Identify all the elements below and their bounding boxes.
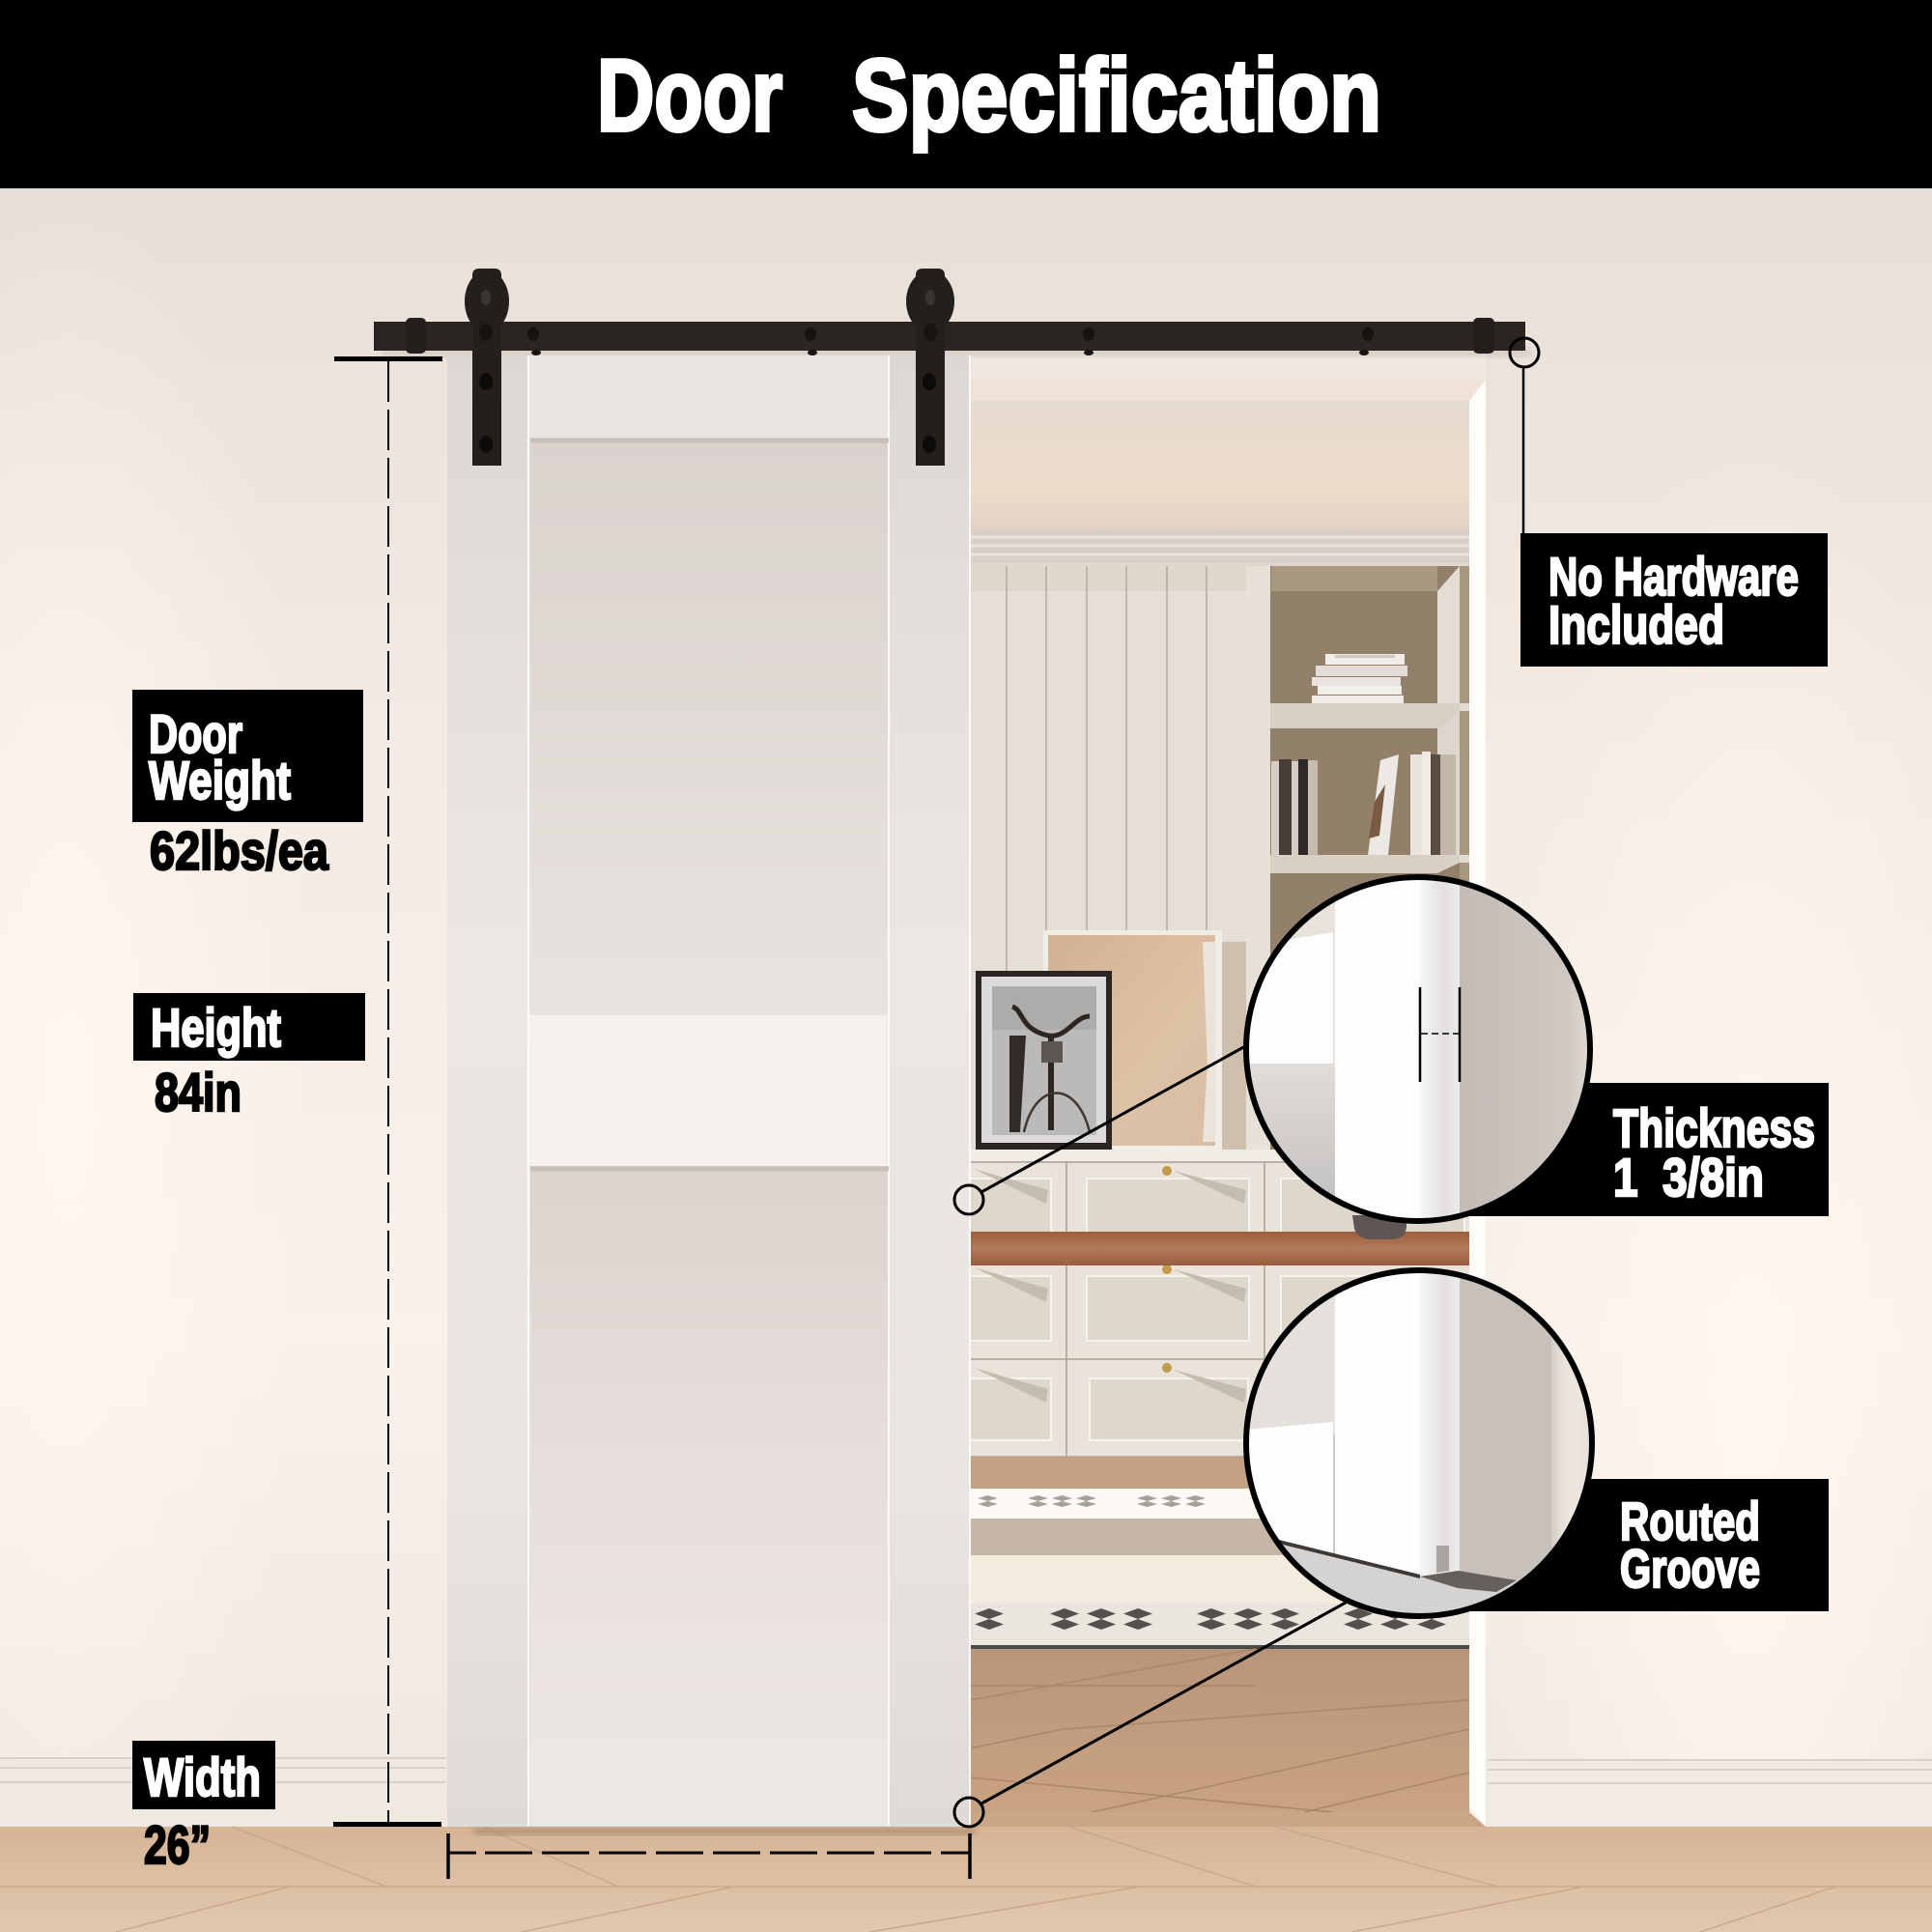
cabinets [970,1150,1469,1457]
label: door weight [132,690,363,822]
label: no hardware included [1520,533,1828,667]
door stiles [447,355,970,1827]
label: thickness box: Thickness [1613,1097,1815,1158]
bicycle photo [976,971,1112,1150]
left hanger strap and wheel [465,269,509,466]
label: no hardware included: Included [1548,594,1724,655]
label: height: Height [151,997,281,1058]
right hanger strap and wheel [906,269,954,466]
bookcase [1246,566,1469,1165]
opening floor [970,1649,1486,1827]
books: flat stack [1312,654,1407,703]
label: thickness box: 1 3/8in [1613,1147,1764,1208]
routed groove notch [1436,1546,1449,1573]
leader lines to detail circles [954,1045,1346,1827]
title [597,39,1381,153]
doorway opening with room scene [970,355,1486,1827]
label: width: Width [144,1747,261,1807]
label: door weight: Weight [149,750,291,810]
barn door rail hardware [374,269,1525,466]
dark object on counter [1352,1215,1406,1239]
label: thickness box [1468,1083,1829,1216]
front floor [0,1812,1932,1932]
title: Specification [852,39,1381,153]
bottom rail [528,1742,889,1826]
rail shadow on wall [382,348,1531,357]
height value: 84in [155,1062,242,1122]
detail circle: routed groove [1245,1270,1594,1623]
door frame [970,355,1486,1827]
rail stops [406,318,1494,354]
rail bolts [527,327,1374,355]
barn door [447,355,970,1827]
label: routed groove box [1468,1479,1829,1611]
books: upright [1271,752,1456,855]
label: door weight: Door [149,703,242,764]
door weight value: 62lbs/ea [150,820,329,881]
title: Door [597,39,782,153]
lower recessed panel [530,1166,889,1742]
width dimension line [448,1833,970,1879]
thickness marker [1420,987,1460,1082]
rug [970,1489,1469,1649]
art print with tan frame [1043,930,1246,1150]
baseboards [0,1758,1932,1827]
upper recessed panel [530,438,889,1015]
label: height [133,993,365,1061]
label: no hardware included: No Hardware [1548,546,1799,607]
width value: 26” [144,1814,211,1875]
label: no hardware leader [1510,338,1539,533]
track rail [374,322,1525,351]
label: routed groove box: Groove [1620,1538,1760,1599]
detail circle: thickness [1246,876,1605,1228]
top rail [528,355,889,438]
wainscot panels [970,566,1246,1151]
height dimension line [333,356,442,1827]
back floor strip [970,1457,1469,1490]
wood counter [970,1232,1469,1265]
ceiling [970,401,1469,528]
header bar [0,0,1932,188]
label: routed groove box: Routed [1620,1491,1760,1551]
crown moulding [970,528,1469,591]
middle rail [528,1015,887,1166]
